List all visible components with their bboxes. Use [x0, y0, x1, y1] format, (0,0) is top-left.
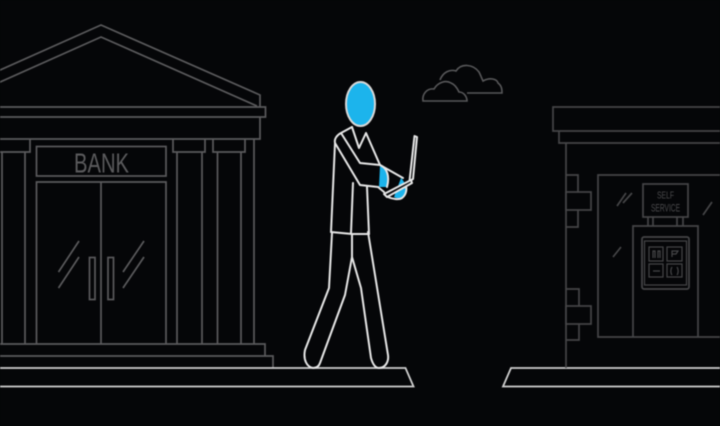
- bank columns: [0, 139, 254, 344]
- kiosk machine: [633, 226, 698, 337]
- bank doors: [36, 182, 166, 344]
- building wall: [565, 143, 567, 368]
- bank sign: [36, 146, 166, 178]
- self service sign: SELF: [657, 190, 674, 202]
- cloud icon: [423, 65, 502, 101]
- hand: near: [379, 166, 388, 187]
- self service sign: [643, 184, 688, 226]
- bank steps: [0, 344, 273, 368]
- bank sign: BANK: [74, 148, 129, 178]
- laptop: [384, 136, 417, 197]
- head: [346, 82, 375, 126]
- kiosk buttons: [649, 247, 682, 277]
- bank building: [0, 25, 273, 368]
- person with laptop: [304, 82, 417, 368]
- legs: [304, 232, 388, 368]
- hand: far: [394, 178, 406, 198]
- jacket: [331, 127, 406, 234]
- building roof: [553, 107, 720, 143]
- window: [598, 175, 720, 337]
- self service building: [553, 107, 720, 368]
- bank roof: [0, 25, 260, 107]
- right ground platform: [503, 368, 720, 386]
- self service sign: SERVICE: [651, 202, 680, 214]
- bank cornice: [0, 107, 266, 139]
- left ground platform: [0, 368, 414, 386]
- wall brackets: [566, 175, 591, 340]
